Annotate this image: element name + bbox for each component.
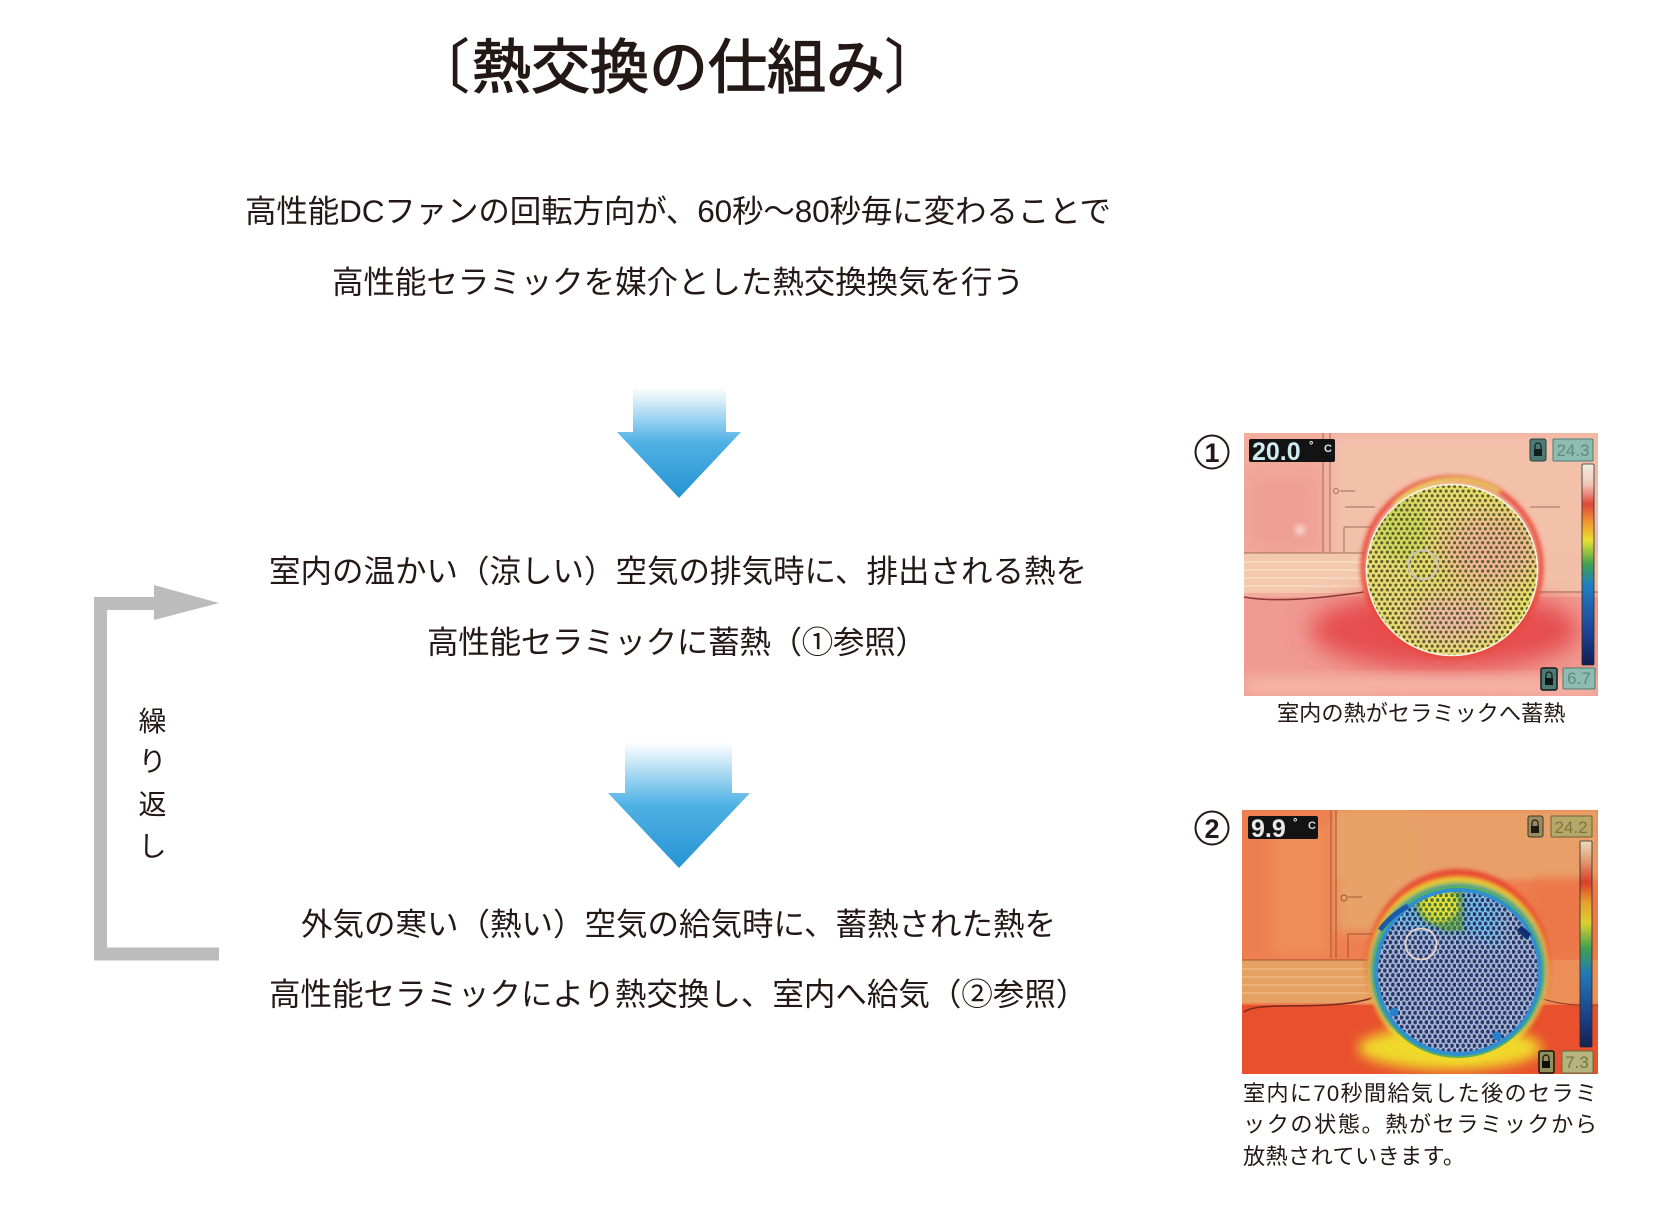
min value [1539,1051,1554,1073]
vertical label: repeat: 繰 [138,706,167,737]
arrow: blue down arrow 2 [608,742,750,868]
halo [1363,478,1541,656]
thermal photo 1: ° [1309,440,1313,452]
wood band [1242,960,1377,1003]
number marker 2 [1196,812,1228,844]
number marker 1: 1 [1204,438,1220,468]
intro text block: 高性能セラミックを媒介とした熱交換換気を行う [332,264,1024,300]
lower red floor [1242,1005,1598,1075]
lower pink [1244,597,1598,697]
thermal photo 2: 7.3 [1565,1053,1589,1072]
caption 2 [1243,1081,1597,1169]
ceramic disc [1366,484,1540,656]
color scale bar [1582,464,1594,665]
vertical label: repeat: り [138,746,167,777]
max value [1530,439,1546,461]
caption 2: 室内に70秒間給気した後のセラミ [1243,1081,1597,1106]
thermal photo 2: 24.2 [1554,818,1588,837]
max value [1528,816,1543,837]
title: 熱交換の仕組み [472,35,885,101]
ceramic disc [1372,884,1544,1058]
caption 2: 放熱されていきます。 [1243,1144,1465,1169]
caption 2: ックの状態。熱がセラミックから [1243,1112,1597,1137]
text block: heat storage step [269,553,1087,660]
rainbow halo [1366,869,1550,1063]
text block: heat exchange step [269,906,1087,1012]
arrow: blue down arrow 1 [617,387,741,498]
thermal photo 1: C [1324,443,1332,455]
thermal photo 2 [1242,810,1598,1075]
text block: heat storage step: 高性能セラミックに蓄熱（①参照） [427,624,927,660]
red heat area [1310,590,1580,670]
number marker 1 [1196,436,1228,468]
wood band [1244,553,1374,593]
min value [1541,668,1557,690]
thermal photo 1 [1244,433,1600,697]
vertical label: repeat: 返 [138,789,167,820]
number marker 2: 2 [1204,814,1220,844]
thermal photo 1: 24.3 [1556,441,1590,460]
door lines [1242,810,1377,960]
text block: heat exchange step: 高性能セラミックにより熱交換し、室内へ給気（②参照） [269,976,1087,1012]
intro text block [245,193,1111,300]
vertical label: repeat [138,706,167,862]
thermal photo 2: 9.9 [1251,815,1286,843]
color scale bar [1580,841,1592,1047]
door lines [1244,433,1560,553]
thermal photo 1: 6.7 [1567,669,1591,688]
temperature readout [1248,816,1318,839]
title: 〕 [884,35,943,101]
text block: heat exchange step: 外気の寒い（熱い）空気の給気時に、蓄熱された熱を [301,906,1056,942]
temperature readout [1249,439,1335,462]
text block: heat storage step: 室内の温かい（涼しい）空気の排気時に、排出される熱を [269,553,1087,589]
caption 1: 室内の熱がセラミックへ蓄熱 [1277,701,1565,726]
thermal photo 1: 20.0 [1252,438,1301,466]
arrow: grey repeat loop [100,585,219,954]
yellow cold floor blob [1358,1026,1542,1070]
intro text block: 高性能DCファンの回転方向が、60秒～80秒毎に変わることで [245,193,1111,229]
thermal photo 2: ° [1293,817,1297,829]
thermal photo 2: C [1308,820,1316,832]
title: 〔 [411,35,470,101]
vertical label: repeat: し [138,831,167,862]
